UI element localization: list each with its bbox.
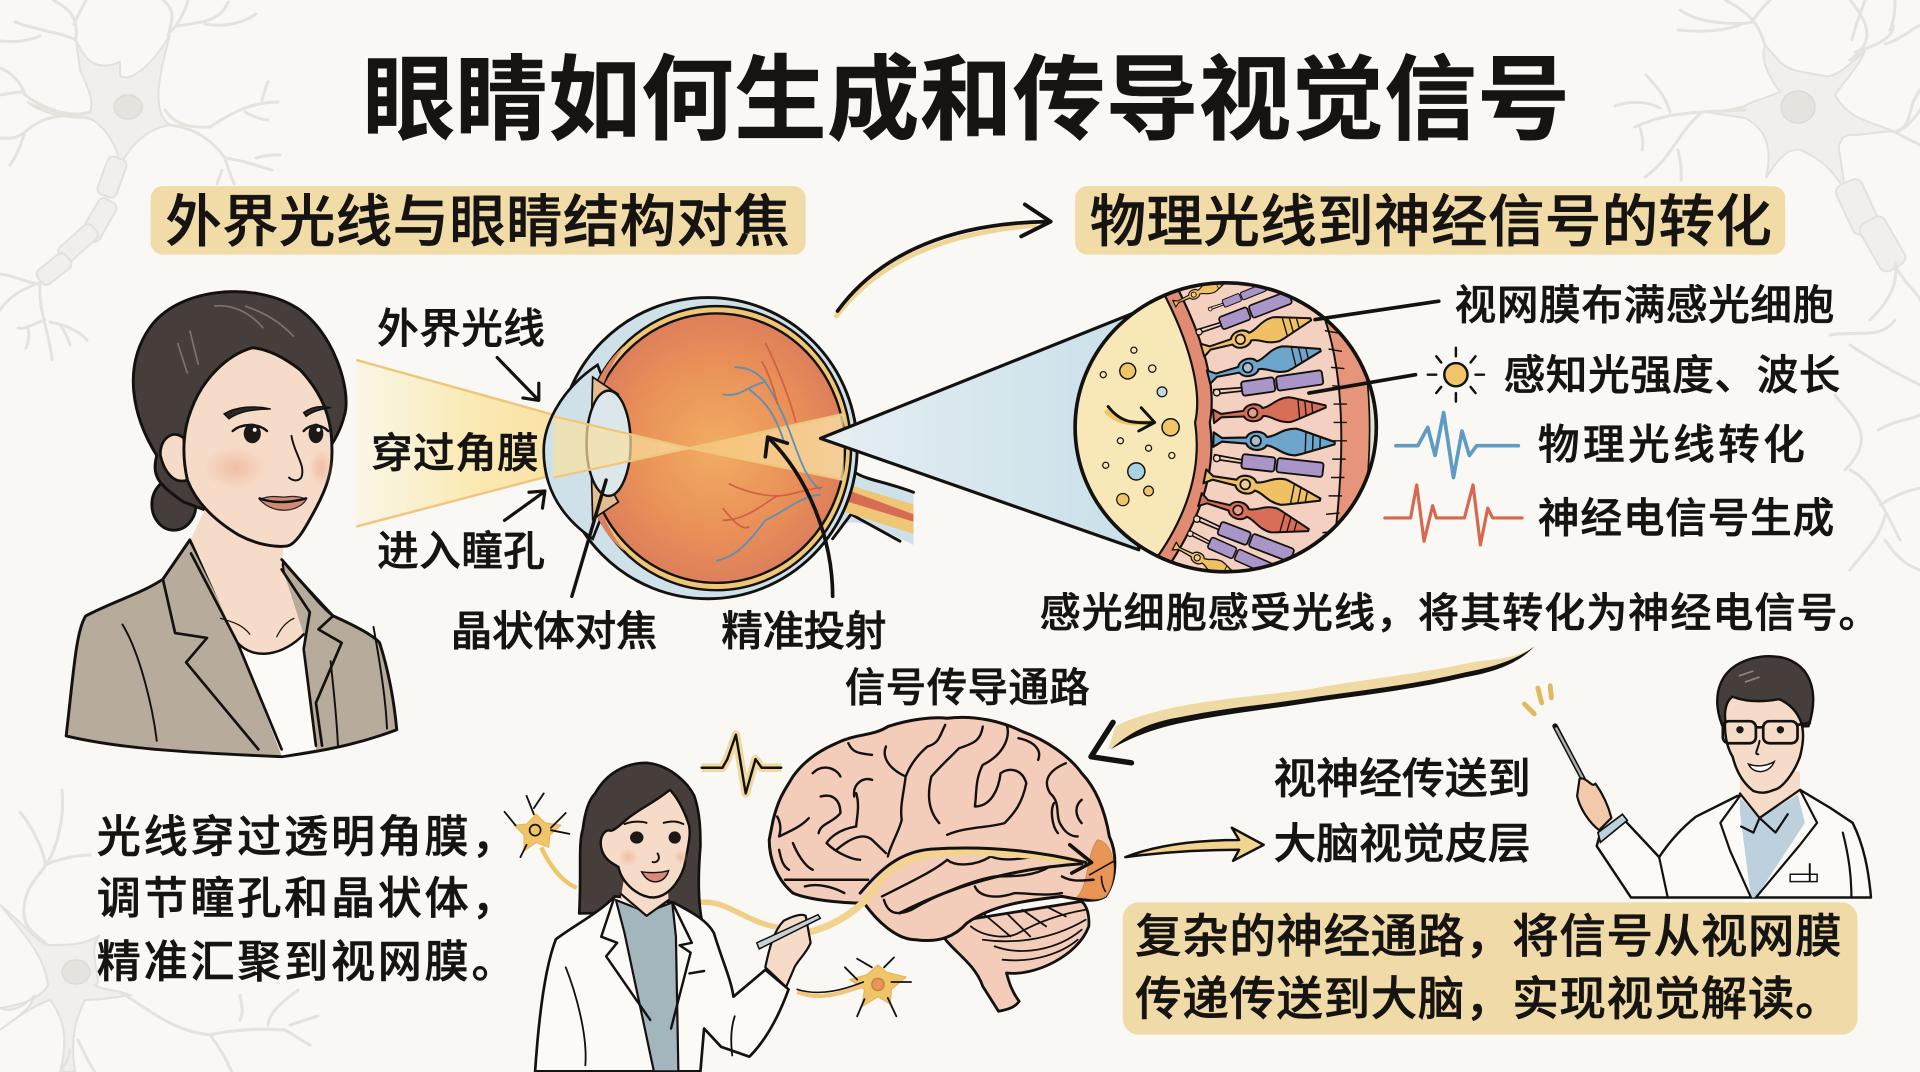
neck [621,875,669,916]
jacket [66,540,397,757]
shirt [616,900,678,1071]
inner globe [588,313,845,583]
neck [1740,771,1800,818]
label: retina full of photoreceptors: 视网膜布满感光细胞 [1455,282,1834,329]
icon: blue wave [1396,413,1518,478]
hair strands [178,306,294,373]
background neuron: top left [0,0,280,360]
caption: photoreceptors convert light: 感光细胞感受光线，将其转化为神经电信号。 [1040,590,1880,636]
cornea [544,365,612,539]
hand and pen [765,915,811,987]
label: senses light intensity and wavelength: 感知光强度、波长 [1504,351,1840,398]
title: 眼睛如何生成和传导视觉信号 [362,48,1570,152]
label: through cornea: 穿过角膜 [371,430,539,477]
arrow: top curve [836,204,1051,316]
outer sclera [558,298,857,599]
callout: neural pathway summary [1123,902,1858,1035]
lens [587,391,631,496]
coat [535,896,789,1071]
sparks [1524,686,1551,714]
temporal folds [882,856,1094,913]
heading: left section: 外界光线与眼睛结构对焦 [165,190,790,253]
inner membrane [1158,291,1213,561]
retinal vessels [716,367,820,561]
label: precise projection: 精准投射 [721,607,887,654]
neck [191,502,304,654]
signal pathway band [805,852,1082,933]
label: lens focusing: 晶状体对焦 [451,607,658,654]
paragraph: light path summary: 调节瞳孔和晶状体， [97,874,516,923]
arrow: cortex outgoing [1125,828,1264,861]
paragraph: light path summary [97,813,516,987]
hair bun [152,479,196,530]
photoreceptor rows [1208,287,1267,312]
hair [1717,656,1813,730]
visual cortex [1078,840,1113,899]
paragraph: light path summary: 精准汇聚到视网膜。 [97,938,516,987]
hair back [133,292,346,520]
paragraph: light path summary: 光线穿过透明角膜， [97,813,516,862]
face [184,348,332,546]
arrow: retina to brain [1091,647,1534,763]
label: neural signal generation: 神经电信号生成 [1538,495,1834,542]
callout: neural pathway summary: 复杂的神经通路，将信号从视网膜 [1135,911,1842,963]
person: woman scientist [535,763,820,1071]
label: physical light conversion: 物理光线转化 [1538,421,1805,468]
leader lines to retina labels [1309,301,1439,393]
icon: sun [1428,348,1484,402]
brows and eyes [224,407,271,419]
eye annotation arrows [497,358,833,596]
label: enter pupil: 进入瞳孔 [377,528,545,575]
callout: neural pathway summary: 传递传送到大脑，实现视觉解读。 [1135,973,1842,1025]
cerebrum outline [769,717,1115,941]
ciliary muscle [591,377,618,519]
shirt [1740,793,1805,898]
background neuron: top right [1615,0,1920,570]
nerve path behind woman [702,902,808,932]
hand and pointer [1555,726,1589,791]
hair [579,763,702,920]
background neuron: bottom left [0,790,318,1072]
light beam into the eye [356,360,585,527]
icon: red wave [1385,485,1522,545]
ear [160,434,187,481]
icon: lower neuron [797,958,911,1016]
person: woman looking at eye [66,292,397,757]
optic nerve [833,463,913,545]
nose and mouth [289,436,302,480]
floating particles [1120,363,1136,379]
label: signal pathway: 信号传导通路 [845,665,1090,711]
back wall bands [1324,320,1369,524]
icon: pulse over woman [702,735,781,793]
yellow retina ring [582,306,851,590]
lapels [163,540,342,749]
face [601,790,690,898]
cerebellum and brainstem [943,901,1089,1011]
diagram: retina detail circle [1073,281,1378,574]
front chamber [578,392,606,504]
converging beam inside eye [553,416,689,478]
heading: right section: 物理光线到神经信号的转化 [1090,190,1772,253]
white shirt [238,634,316,755]
label: optic nerve to visual cortex: 大脑视觉皮层 [1273,820,1531,868]
label: optic nerve to visual cortex: 视神经传送到 [1273,755,1531,803]
coat [1597,790,1871,898]
lapels [601,896,704,1029]
label: outside light: 外界光线 [377,305,545,352]
person: male scientist [1524,656,1871,898]
head [1725,697,1803,793]
diagram: eyeball [544,298,913,599]
glasses [1723,721,1811,743]
icon: left neuron [505,793,577,888]
vitreous area [1077,298,1196,554]
gyri [777,725,1082,893]
magnifying cone [820,313,1139,550]
label: optic nerve to visual cortex [1273,755,1531,868]
diagram: brain [769,717,1115,1011]
